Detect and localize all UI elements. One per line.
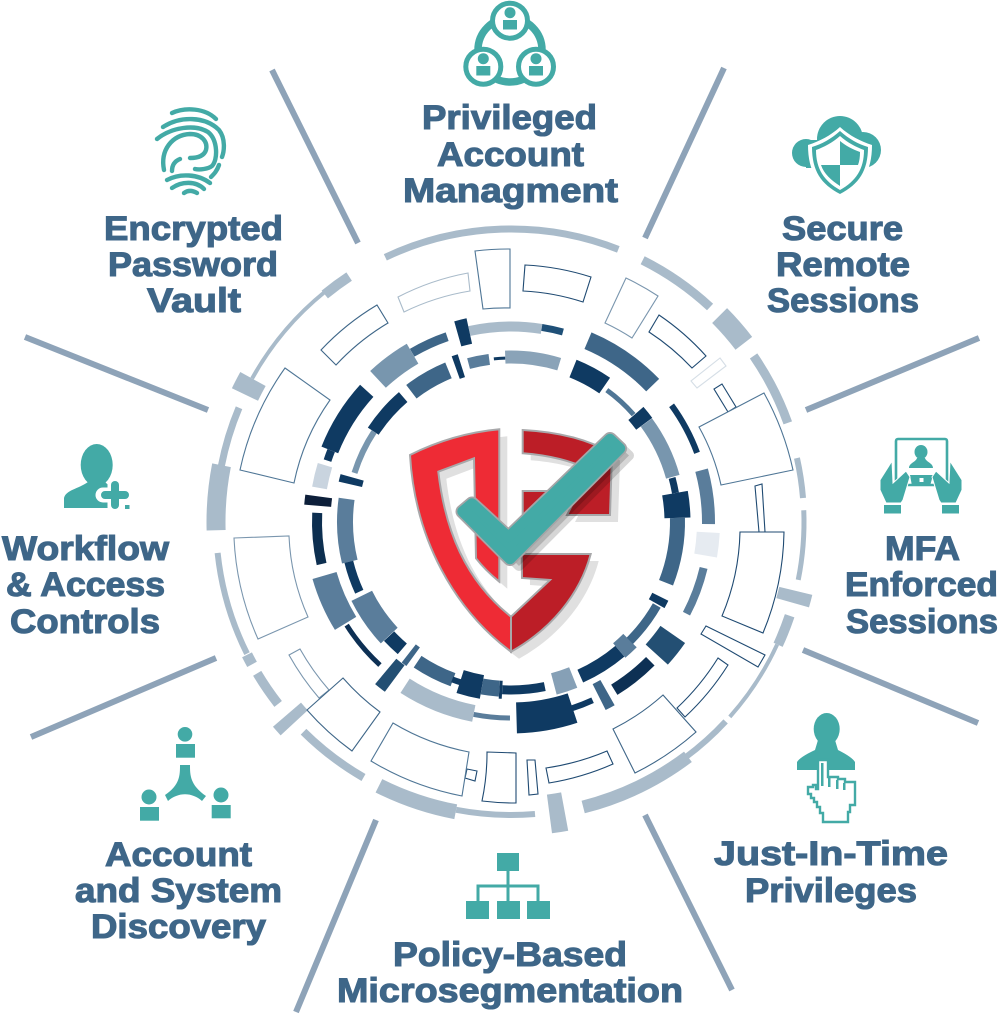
heading: Encrypted Password Vault: Vault (147, 282, 241, 320)
shield left half (410, 429, 511, 652)
checkmark (462, 439, 620, 559)
heading: Workflow & Access Controls: & Access (6, 566, 165, 604)
heading: Workflow & Access Controls: Controls (10, 603, 160, 641)
shield shadow (418, 436, 620, 659)
shield right half (511, 430, 612, 652)
heading: MFA Enforced Sessions: MFA (885, 530, 960, 568)
outlined ring boxes (234, 249, 793, 803)
heading: Secure Remote Sessions: Remote (776, 246, 910, 284)
heading: Just-In-Time Privileges: Just-In-Time (714, 835, 948, 873)
heading: Just-In-Time Privileges (714, 835, 948, 910)
icon: person with pixel hand (797, 713, 855, 822)
heading: Just-In-Time Privileges: Privileges (745, 872, 917, 910)
second ring segments (232, 243, 790, 801)
heading: Account and System Discovery: Discovery (91, 908, 266, 946)
heading: Policy-Based Microsegmentation (337, 936, 683, 1010)
icon: cloud with shield (792, 116, 881, 198)
heading: MFA Enforced Sessions (845, 530, 998, 641)
heading: Encrypted Password Vault: Encrypted (104, 210, 283, 248)
icon: account discovery network (140, 727, 231, 821)
heading: Workflow & Access Controls (2, 530, 170, 641)
heading: Encrypted Password Vault: Password (108, 246, 278, 284)
inner ring segments (273, 284, 749, 760)
heading: Privileged Account Managment: Privileged (422, 99, 597, 137)
heading: MFA Enforced Sessions: Enforced (845, 566, 998, 604)
heading: Privileged Account Managment (403, 99, 618, 210)
heading: Account and System Discovery: and System (75, 872, 282, 910)
heading: Encrypted Password Vault (104, 210, 283, 320)
heading: Account and System Discovery (75, 836, 282, 946)
icon: three connected users (466, 3, 554, 84)
heading: Workflow & Access Controls: Workflow (2, 530, 170, 568)
heading: Secure Remote Sessions: Secure (782, 210, 903, 248)
heading: MFA Enforced Sessions: Sessions (846, 603, 998, 641)
heading: Policy-Based Microsegmentation: Microsegmentation (337, 972, 683, 1010)
heading: Privileged Account Managment: Managment (403, 172, 618, 210)
heading: Account and System Discovery: Account (105, 836, 252, 874)
central shield logo (410, 429, 629, 659)
icon: hands holding tablet (880, 439, 962, 514)
checkmark shadow (472, 446, 629, 566)
heading: Privileged Account Managment: Account (437, 136, 584, 174)
heading: Secure Remote Sessions: Sessions (767, 282, 919, 320)
icon: microsegmentation hierarchy (466, 853, 550, 919)
icon: fingerprint (157, 109, 224, 193)
heading: Secure Remote Sessions (767, 210, 919, 320)
heading: Policy-Based Microsegmentation: Policy-Based (393, 936, 627, 974)
outer ring segments (93, 104, 929, 940)
icon: user with plus (64, 444, 130, 509)
